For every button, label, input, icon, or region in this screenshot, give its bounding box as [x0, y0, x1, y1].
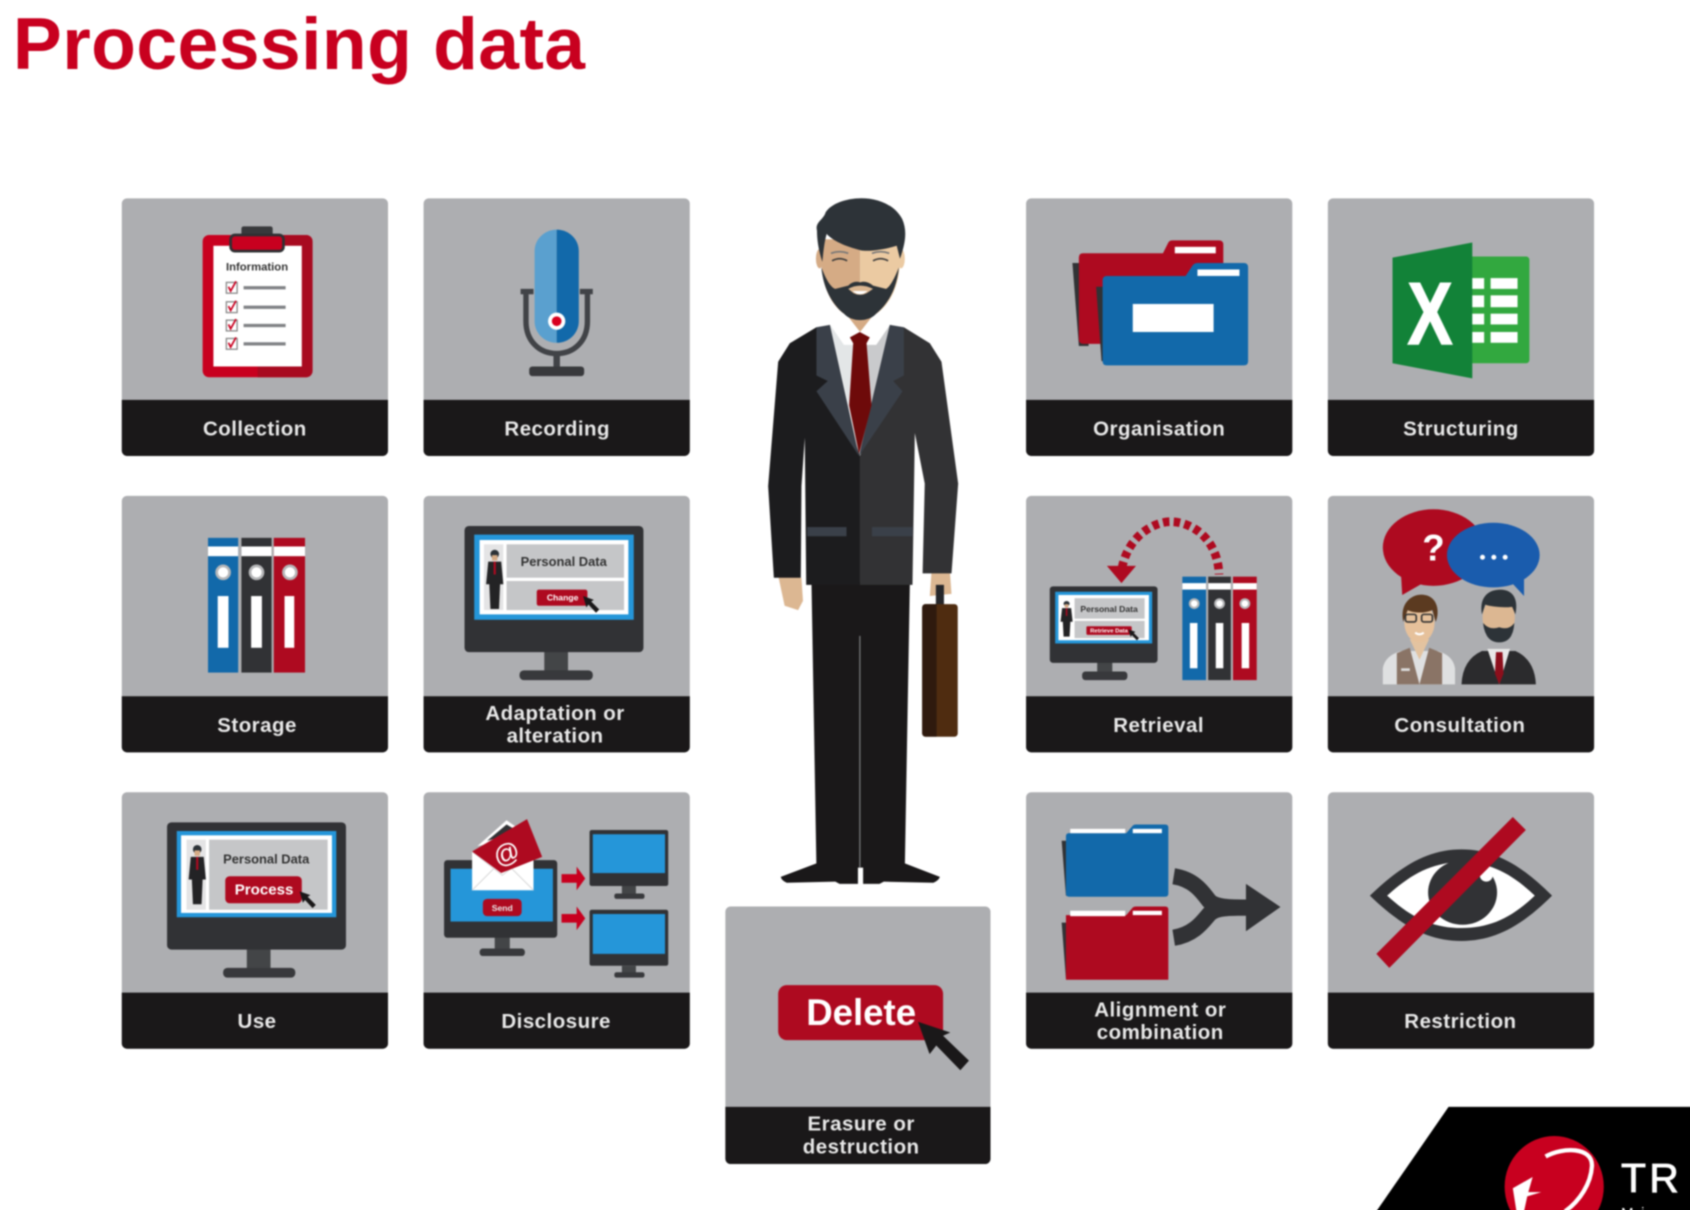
neck and shirt: [830, 313, 890, 456]
jacket right: [860, 327, 958, 585]
panel: Collection: [122, 198, 388, 456]
panel: Storage: Storage: [217, 714, 297, 737]
icon: monitor with Change button: [465, 526, 643, 680]
panel: Recording: Recording: [504, 417, 610, 440]
illustration: businessman: [768, 198, 958, 884]
jacket left: [768, 327, 860, 585]
icon: clipboard: Information: [226, 262, 288, 274]
hands: [778, 571, 951, 610]
logo: Trend Micro: TR: [1621, 1155, 1682, 1201]
icon: monitor with Process button: Process: [235, 882, 293, 899]
icon: dashed return arrow: [1107, 522, 1219, 583]
head: [816, 198, 905, 320]
panel: Adaptation or alteration: alteration: [507, 725, 604, 748]
icon: microphone: [521, 230, 593, 376]
panel: Restriction: [1328, 792, 1594, 1049]
icon: crossed-out eye: [1370, 817, 1552, 968]
panel: Consultation: Consultation: [1394, 714, 1525, 737]
panel: Adaptation or alteration: Adaptation or: [485, 702, 625, 725]
panel: Alignment or combination: combination: [1097, 1021, 1224, 1044]
icon: bearded person: [1462, 590, 1536, 684]
panel: Use: [122, 792, 388, 1049]
icon: folders: [1062, 825, 1168, 980]
icon: spreadsheet: [1393, 243, 1529, 378]
panel: Disclosure: [424, 792, 690, 1049]
panel: Restriction: Restriction: [1404, 1010, 1517, 1033]
icon: monitor with Process button: Personal Data: [223, 851, 310, 866]
icon: speech bubbles: [1383, 509, 1540, 596]
icon: monitor with Process button: [167, 822, 346, 978]
icon: clipboard: [203, 226, 313, 377]
tie: [849, 332, 872, 454]
icon: folders: [1072, 240, 1248, 365]
panel: Use: Use: [238, 1010, 277, 1033]
icon: monitor with Retrieve Data button: Personal Data: [1080, 604, 1138, 614]
icon: monitor with Change button: Personal Data: [521, 554, 608, 569]
panel: Disclosure: Disclosure: [501, 1010, 611, 1033]
icon: Delete button: [778, 985, 969, 1070]
lapels: [816, 325, 904, 456]
panel: Erasure or destruction: Erasure or: [808, 1113, 915, 1136]
icon: person with glasses: [1383, 595, 1455, 684]
panel: Retrieval: [1026, 496, 1292, 752]
panel: Structuring: Structuring: [1403, 417, 1519, 440]
panel: Organisation: Organisation: [1093, 417, 1225, 440]
icon: binders: [1182, 577, 1257, 680]
icon: monitor with Retrieve Data button: Retrieve Data: [1090, 629, 1129, 635]
panel: Erasure or destruction: destruction: [803, 1135, 920, 1158]
icon: speech bubbles: ?: [1422, 527, 1445, 568]
panel: Collection: Collection: [203, 417, 307, 440]
panel: Adaptation or alteration: [424, 496, 690, 752]
panel: Storage: [122, 496, 388, 752]
logo: Trend Micro: [1349, 1107, 1690, 1210]
panel: Organisation: [1026, 198, 1292, 456]
icon: monitor with Retrieve Data button: [1050, 586, 1158, 680]
icon: receiving monitors: [590, 830, 668, 978]
panel: Alignment or combination: [1026, 792, 1292, 1049]
icon: Delete button: Delete: [806, 992, 916, 1033]
panel: Structuring: [1328, 198, 1594, 456]
shoes: [781, 863, 940, 884]
icon: sending monitor with email: @: [489, 836, 524, 872]
icon: monitor with Change button: Change: [547, 592, 579, 602]
icon: sending monitor with email: [444, 819, 557, 956]
title: Processing data: [13, 3, 586, 85]
icon: red arrows: [562, 867, 585, 930]
panel: Alignment or combination: Alignment or: [1094, 998, 1226, 1021]
pockets: [807, 527, 912, 536]
panel: Recording: [424, 198, 690, 456]
panel: Retrieval: Retrieval: [1113, 714, 1204, 737]
panel: Erasure or destruction: [725, 906, 991, 1164]
icon: merge arrow: [1174, 876, 1280, 938]
logo mark: [1505, 1136, 1604, 1210]
icon: binders: [208, 538, 305, 673]
icon: sending monitor with email: Send: [492, 903, 513, 913]
icon: spreadsheet: X: [1408, 264, 1452, 363]
trousers: [811, 582, 910, 868]
panel: Consultation: [1328, 496, 1594, 752]
briefcase: [922, 585, 958, 737]
